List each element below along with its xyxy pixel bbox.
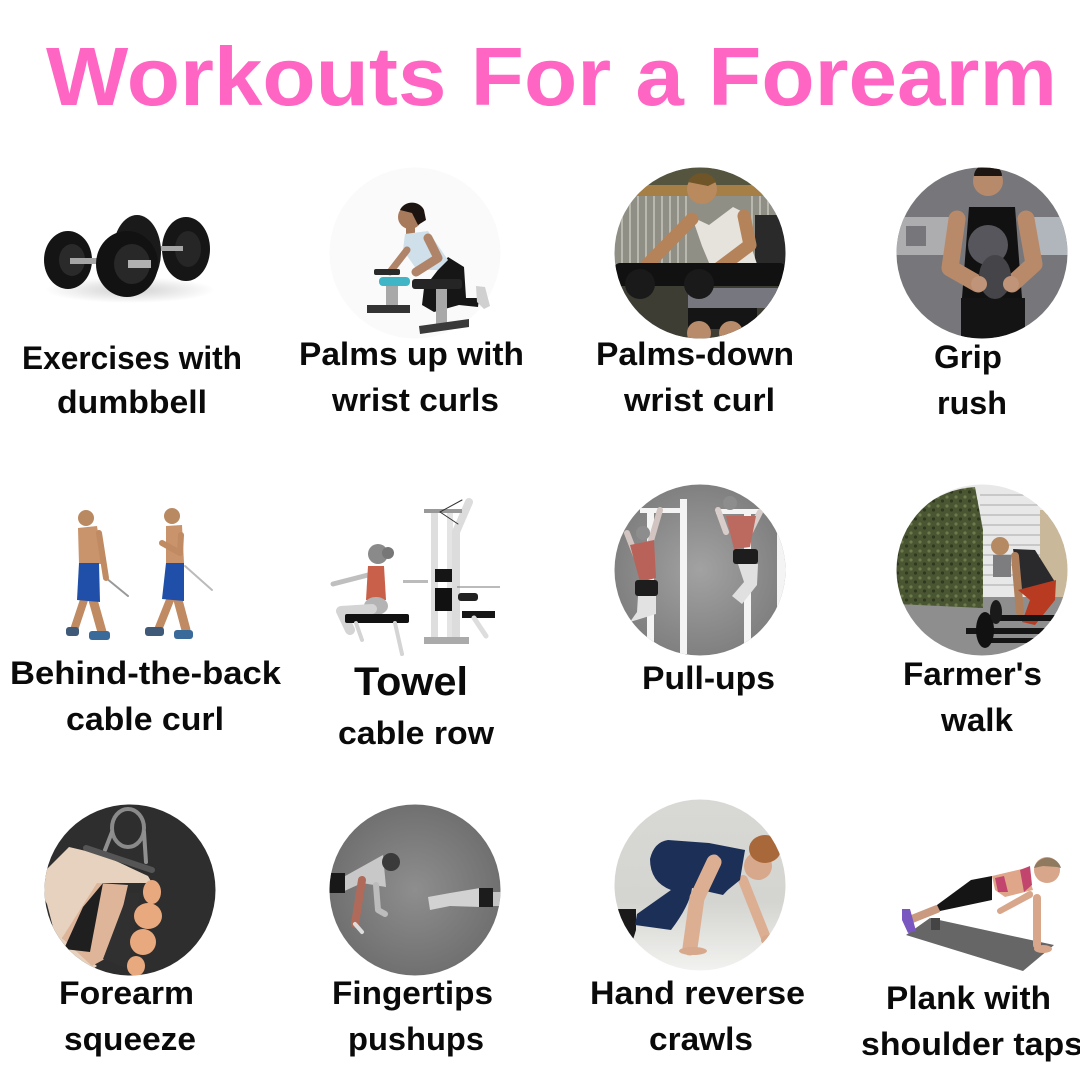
label: walk (940, 702, 1013, 738)
photo: woman in plank on mat (902, 857, 1061, 971)
label (596, 336, 794, 418)
label (332, 975, 493, 1057)
label: cable curl (66, 701, 224, 737)
label: cable row (338, 715, 494, 751)
label: shoulder taps (861, 1026, 1080, 1062)
label: squeeze (64, 1021, 196, 1057)
label (10, 655, 281, 737)
photo: man lifting farmer's bars (896, 484, 1070, 657)
illustration: fingertip pushup figures (329, 804, 501, 976)
panel: hand reverse crawls (590, 799, 805, 1057)
icon: dumbbells (44, 215, 215, 303)
label (338, 660, 494, 751)
illustration: two pull-up figures (614, 484, 786, 658)
label: Plank with (886, 980, 1051, 1016)
panel: palms-down wrist curl (596, 167, 794, 418)
label: Forearm (59, 975, 194, 1011)
panel: exercises with dumbbell (22, 215, 242, 420)
label (903, 656, 1042, 738)
label: Fingertips (332, 975, 493, 1011)
panel: grip rush (896, 164, 1068, 421)
label: Grip (934, 339, 1002, 375)
label: Farmer's (903, 656, 1042, 692)
label (590, 975, 805, 1057)
panel: forearm squeeze (40, 804, 216, 1057)
panel: farmer's walk (896, 484, 1070, 738)
label: rush (937, 385, 1007, 421)
label (861, 980, 1080, 1062)
title: Workouts For a Forearm (46, 30, 1057, 123)
panel: plank with shoulder taps (861, 857, 1080, 1062)
photo: woman on bench (330, 168, 500, 338)
label: Hand reverse (590, 975, 805, 1011)
label (59, 975, 196, 1057)
label: wrist curls (331, 382, 499, 418)
panel: fingertips pushups (329, 804, 501, 1057)
panel: behind-the-back cable curl (10, 508, 281, 737)
photo: man at bench (614, 167, 787, 345)
label: Pull-ups (642, 660, 775, 696)
illustration: seated row machine (333, 500, 500, 654)
label: Palms-down (596, 336, 794, 372)
panel: towel cable row (333, 500, 500, 751)
label: pushups (348, 1021, 484, 1057)
label: Behind-the-back (10, 655, 281, 691)
label (22, 340, 242, 420)
label (299, 336, 524, 418)
label: Palms up with (299, 336, 524, 372)
photo: hand with gripper (40, 804, 216, 976)
label: Exercises with (22, 340, 242, 376)
photo: woman crawling (614, 799, 786, 971)
panel: palms up with wrist curls (299, 168, 524, 418)
label: wrist curl (623, 382, 775, 418)
label: crawls (649, 1021, 753, 1057)
illustration: two men with cable (66, 508, 212, 640)
panel: pull-ups (614, 484, 786, 696)
label: Towel (354, 660, 468, 704)
photo: man holding kettlebell (896, 164, 1068, 346)
label: dumbbell (57, 384, 207, 420)
label (934, 339, 1007, 421)
